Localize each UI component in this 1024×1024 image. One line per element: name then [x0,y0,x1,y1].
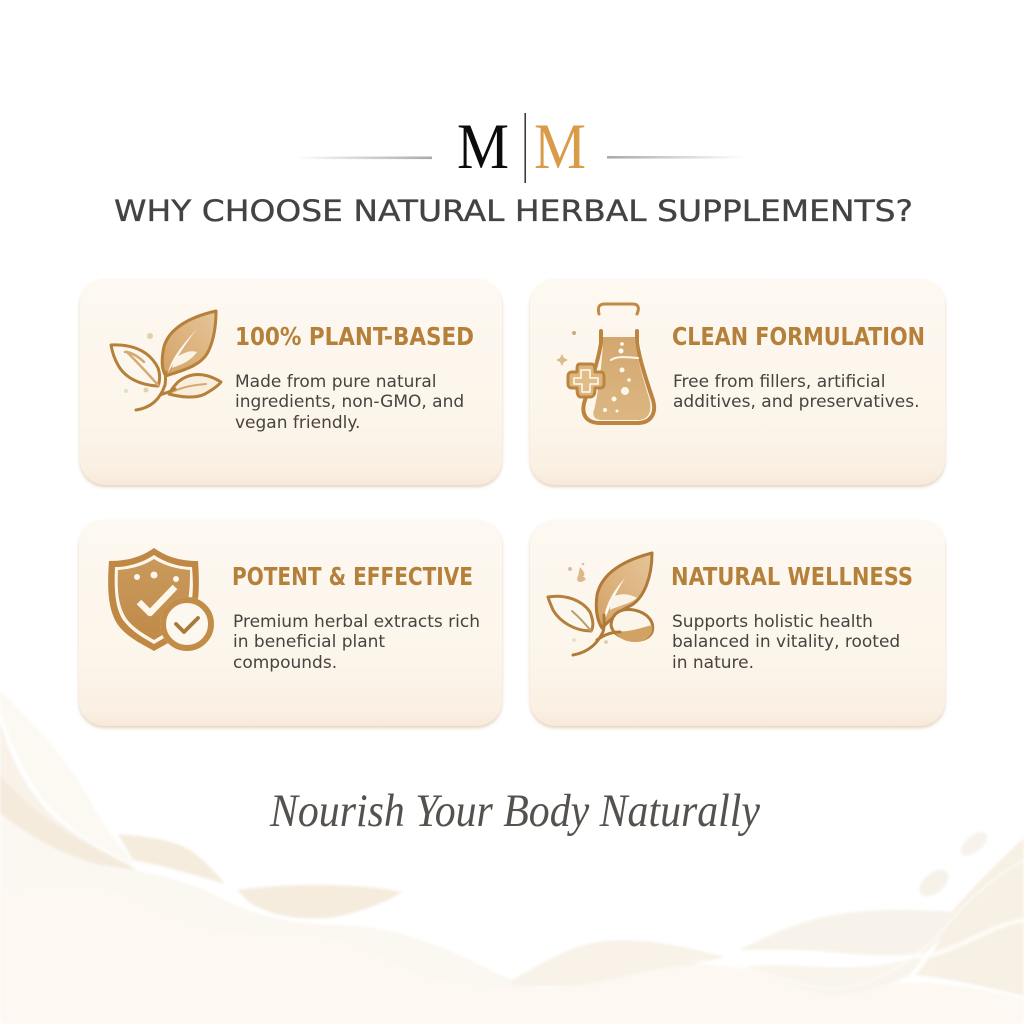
background waves [0,690,1024,1024]
description: Free from fillers, artificial [673,372,885,392]
heading: CLEAN FORMULATION [672,322,925,351]
description: Supports holistic health [672,612,873,632]
logo: divider [524,113,526,183]
heading: 100% PLANT-BASED [235,322,474,351]
icon: shield with check [108,548,214,651]
description: Made from pure natural [235,372,437,392]
description: vegan friendly. [235,413,360,433]
description: compounds. [233,653,337,673]
description: additives, and preservatives. [673,392,920,412]
logo [457,111,586,183]
tagline: Nourish Your Body Naturally [269,785,760,837]
logo: black M: M [457,111,509,183]
icon: leaves with nut [548,553,653,655]
description: in beneficial plant [233,632,385,652]
heading: NATURAL WELLNESS [671,562,913,591]
panel: clean formulation [530,279,945,485]
description: ingredients, non-GMO, and [235,392,464,412]
panel: potent & effective [79,520,502,726]
title: WHY CHOOSE NATURAL HERBAL SUPPLEMENTS? [114,194,913,228]
icon: flask [556,304,654,423]
panel: natural wellness [530,520,945,726]
heading: POTENT & EFFECTIVE [232,562,473,591]
description: in nature. [672,653,754,673]
icon: leaves [111,311,221,410]
logo: gold M: M [534,111,586,183]
description: Premium herbal extracts rich [233,612,480,632]
panel: 100% plant-based [80,279,502,485]
description: balanced in vitality, rooted [672,632,900,652]
